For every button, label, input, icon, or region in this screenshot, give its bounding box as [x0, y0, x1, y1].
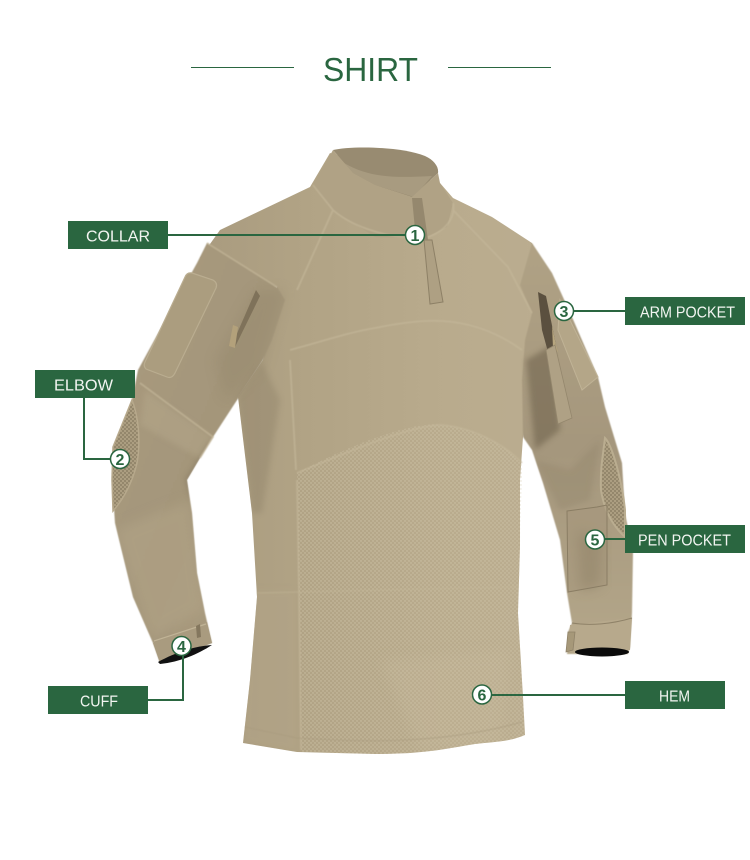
callout 6: hem — [472, 681, 725, 709]
collar inner lower band — [344, 163, 432, 197]
front zip — [412, 198, 443, 304]
collar front — [313, 150, 453, 238]
collar inner — [333, 148, 438, 197]
pen pocket — [567, 505, 607, 592]
right arm pocket flap — [558, 300, 598, 390]
callout 3: arm pocket — [554, 297, 745, 325]
right cuff — [566, 618, 632, 656]
callout 6: hem: 6 — [478, 688, 487, 704]
callout 2: elbow: ELBOW — [54, 378, 114, 394]
callout 3: arm pocket: ARM POCKET — [640, 304, 735, 322]
callout 2: elbow — [35, 370, 135, 469]
shirt torso — [200, 153, 552, 754]
callout 6: hem: HEM — [659, 688, 690, 706]
right sleeve — [520, 243, 633, 654]
shirt illustration — [112, 148, 633, 754]
right sleeve strip pocket — [546, 345, 572, 424]
left sleeve zip — [229, 290, 260, 348]
title: SHIRT — [323, 51, 418, 88]
seams — [140, 185, 532, 750]
left arm patch pocket — [144, 273, 217, 378]
hem — [245, 722, 522, 741]
callout 5: pen pocket — [586, 525, 745, 553]
left sleeve — [112, 243, 285, 663]
callout 2: elbow: 2 — [116, 452, 125, 469]
soft shading — [115, 290, 602, 752]
callout 1: collar: 1 — [411, 228, 420, 245]
left elbow patch — [112, 400, 139, 511]
callout 5: pen pocket: 5 — [591, 532, 600, 550]
callout 1: collar: COLLAR — [86, 228, 150, 246]
callout 1: collar — [68, 221, 424, 249]
callout 3: arm pocket: 3 — [560, 304, 569, 321]
right sleeve zip — [538, 292, 558, 352]
callout 4: cuff: CUFF — [80, 694, 118, 710]
left cuff — [153, 622, 212, 664]
right elbow patch — [601, 438, 625, 537]
callout 5: pen pocket: PEN POCKET — [638, 532, 731, 550]
callout 4: cuff — [48, 636, 191, 714]
callout 4: cuff: 4 — [177, 639, 186, 656]
mesh panel — [297, 424, 525, 754]
